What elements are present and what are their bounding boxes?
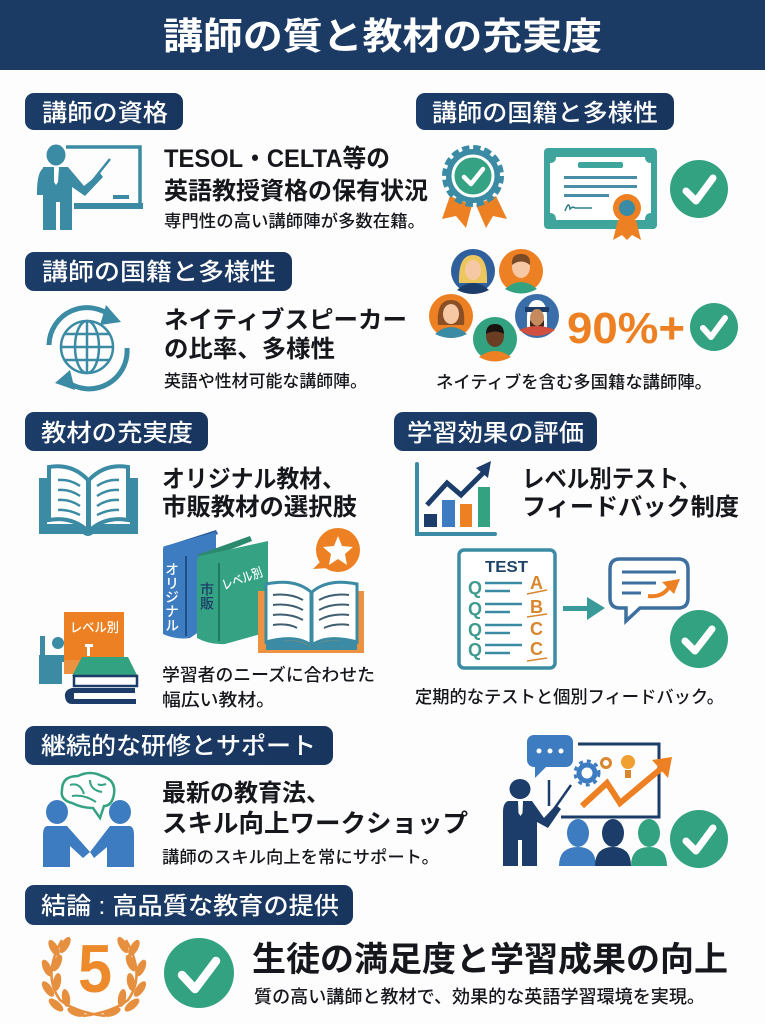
text: workshop: スキル向上ワークショップ	[162, 810, 468, 838]
icon: stack of textbooks: レベル別	[220, 564, 264, 593]
icon: green check 3	[670, 610, 728, 668]
text: level test and feedback: レベル別テスト、	[522, 466, 701, 493]
icon: level book and board: レベル別	[70, 620, 119, 635]
icon: star speech bubble	[313, 528, 360, 572]
icon: test paper	[459, 550, 555, 668]
text: TESOL qualifications: TESOL・CELTA等の	[164, 145, 390, 173]
heading: 継続的な研修とサポート	[25, 726, 333, 765]
heading: 結論: 結論 : 高品質な教育の提供	[41, 893, 339, 920]
heading: 教材の充実度	[25, 412, 208, 451]
icon: laurel with 5: 5	[78, 931, 112, 1007]
icon: test paper: B	[530, 597, 543, 617]
text: TESOL qualifications	[164, 145, 428, 231]
icon: level book and board	[39, 612, 137, 704]
heading: 学習効果の評価	[394, 412, 597, 451]
heading: 講師の資格: 講師の資格	[42, 100, 168, 127]
text: workshop: 講師のスキル向上を常にサポート。	[162, 848, 439, 867]
heading: 教材の充実度: 教材の充実度	[41, 420, 193, 447]
icon: brain and handshake	[43, 773, 134, 867]
icon: test paper: C	[530, 619, 543, 639]
text: native speaker ratio: ネイティブスピーカー	[164, 306, 407, 334]
text: materials note: 学習者のニーズに合わせた	[162, 665, 375, 685]
icon: test paper: Q	[468, 578, 482, 598]
text: native speaker ratio	[164, 306, 407, 391]
text: TESOL qualifications: 専門性の高い講師陣が多数在籍。	[164, 211, 425, 231]
icon: globe with arrows	[49, 305, 127, 390]
heading: 講師の国籍と多様性 top	[416, 93, 674, 130]
text: native speaker ratio: 英語や性材可能な講師陣。	[164, 372, 367, 391]
icon: feedback speech bubble	[610, 559, 688, 621]
text: TESOL qualifications: 英語教授資格の保有状況	[164, 178, 428, 205]
heading: 講師の国籍と多様性	[25, 252, 292, 291]
text: original and commercial materials	[162, 466, 357, 521]
heading: 継続的な研修とサポート: 継続的な研修とサポート	[41, 733, 316, 760]
icon: certificate	[544, 148, 657, 240]
text: level test and feedback: フィードバック制度	[522, 494, 739, 521]
icon: growth bar chart	[417, 461, 495, 534]
text: materials note: 幅広い教材。	[162, 690, 275, 710]
text: multinational teachers: ネイティブを含む多国籍な講師陣。	[436, 372, 712, 392]
icon: presenter with audience	[503, 735, 672, 866]
icon: rosette badge	[442, 149, 507, 228]
text: test note: 定期的なテストと個別フィードバック。	[415, 687, 724, 707]
icon: stack of textbooks	[163, 530, 268, 644]
text: original and commercial materials: オリジナル教材、	[162, 466, 345, 493]
icon: test paper: Q	[468, 640, 482, 660]
text: native speaker ratio: の比率、多様性	[164, 336, 335, 363]
text: conclusion: 質の高い講師と教材で、効果的な英語学習環境を実現。	[254, 987, 705, 1007]
text: conclusion: 生徒の満足度と学習成果の向上	[252, 941, 728, 979]
text: materials note	[162, 665, 375, 710]
stat: 90%+: 90%+	[567, 304, 685, 353]
icon: open book	[39, 466, 138, 536]
text: level test and feedback	[522, 466, 739, 521]
arrow: test to feedback	[563, 597, 605, 620]
text: original and commercial materials: 市販教材の選択肢	[162, 494, 357, 521]
heading: 学習効果の評価: 学習効果の評価	[407, 420, 584, 447]
heading: 結論	[25, 885, 353, 925]
icon: test paper: Q	[468, 599, 482, 619]
icon: test paper: A	[530, 573, 543, 593]
icon: green check 4	[670, 810, 728, 868]
icon: test paper: Q	[468, 620, 482, 640]
icon: green check 1	[670, 160, 728, 218]
icon: stack of textbooks: 市販	[199, 581, 215, 610]
icon: green check 2	[690, 303, 738, 351]
heading: 講師の国籍と多様性: 講師の国籍と多様性	[42, 259, 276, 286]
icon: diverse teacher portraits	[429, 249, 559, 362]
text: conclusion	[252, 941, 728, 1007]
icon: laurel with 5	[40, 931, 148, 1019]
heading: 講師の国籍と多様性 top: 講師の国籍と多様性	[432, 100, 658, 127]
title: 講師の質と教材の充実度	[163, 16, 602, 57]
text: workshop	[162, 780, 468, 867]
icon: stack of textbooks: オリジナル	[164, 562, 180, 632]
icon: large open book	[258, 582, 364, 653]
icon: test paper: C	[530, 639, 543, 659]
text: workshop: 最新の教育法、	[162, 780, 330, 807]
icon: test paper: TEST	[485, 559, 528, 576]
title	[0, 0, 765, 70]
icon: teacher at whiteboard	[37, 144, 143, 230]
icon: green check 5	[164, 938, 234, 1008]
heading: 講師の資格	[25, 93, 183, 130]
